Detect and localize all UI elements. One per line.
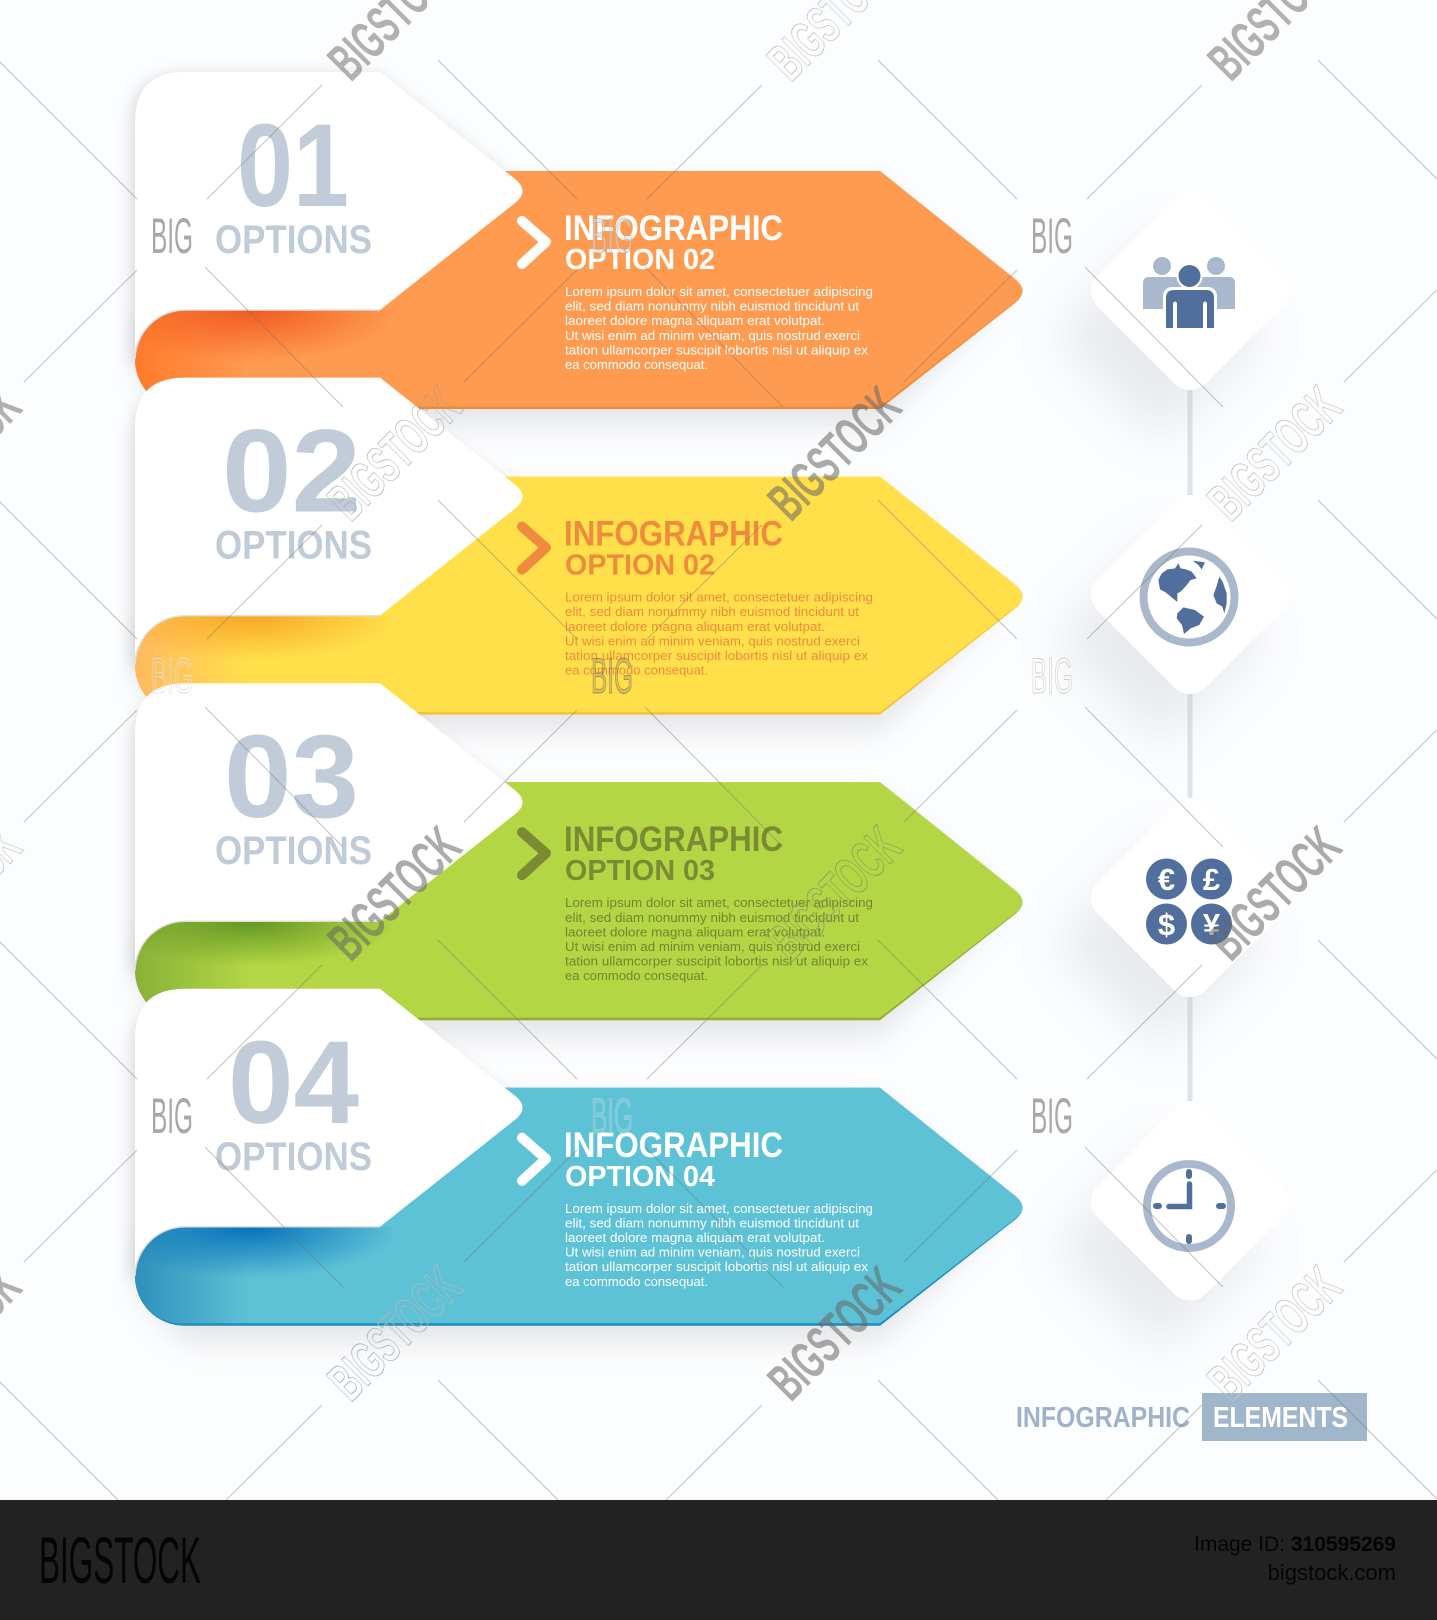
tab lower edge — [135, 1227, 380, 1276]
body text: laoreet dolore magna aliquam erat volutpat. — [565, 620, 825, 634]
number 02: 02 — [222, 406, 361, 538]
body text: tation ullamcorper suscipit lobortis nisl ut aliquip ex — [565, 649, 869, 663]
diamond: currency — [1052, 790, 1298, 1051]
label: infographic elements: INFOGRAPHIC — [1016, 1402, 1190, 1434]
heading: INFOGRAPHIC — [564, 1126, 783, 1165]
orange ribbon — [135, 171, 1022, 409]
diamond: people — [1052, 183, 1298, 444]
body text — [565, 1202, 873, 1289]
subheading: OPTION 04 — [565, 1161, 715, 1193]
white tab back strip — [135, 606, 190, 666]
heading: INFOGRAPHIC — [564, 820, 783, 859]
body text: Ut wisi enim ad minim veniam, quis nostrud exerci — [565, 634, 860, 648]
watermark: BIGSTOCK rotated marks: BIGSTOCK — [1197, 816, 1352, 971]
icon: currency coins: $ — [1158, 907, 1175, 942]
tab lower edge — [135, 921, 380, 970]
label: infographic elements: ELEMENTS — [1213, 1402, 1348, 1434]
body text: laoreet dolore magna aliquam erat volutpat. — [565, 925, 825, 939]
body text: Lorem ipsum dolor sit amet, consectetuer adipiscing — [565, 285, 873, 299]
ribbon shadow — [140, 1107, 1000, 1342]
options label: OPTIONS — [215, 524, 372, 568]
watermark: BIG marks: BIG — [151, 648, 193, 704]
panel: option 03 — [132, 683, 1022, 1036]
white tab shadow — [132, 391, 512, 669]
watermark: BIG marks: BIG — [591, 648, 633, 704]
body text — [565, 896, 873, 983]
watermark: BIG marks: BIG — [151, 208, 193, 264]
icon: globe — [1144, 552, 1234, 642]
watermark: BIGSTOCK rotated marks: BIGSTOCK — [317, 816, 472, 971]
chevron — [522, 1138, 546, 1181]
text: BIG — [1031, 1088, 1073, 1144]
watermark: BIGSTOCK rotated marks: BIGSTOCK — [1197, 376, 1352, 531]
body text: Lorem ipsum dolor sit amet, consectetuer adipiscing — [565, 1202, 873, 1216]
label: infographic elements — [1016, 1393, 1367, 1441]
white tab shadow — [132, 75, 512, 363]
chevron — [522, 527, 546, 570]
watermark: BIG marks: BIG — [591, 1088, 633, 1144]
body text: tation ullamcorper suscipit lobortis nisl ut aliquip ex — [565, 955, 869, 969]
body text: Lorem ipsum dolor sit amet, consectetuer adipiscing — [565, 591, 873, 605]
body text: ea commodo consequat. — [565, 664, 708, 678]
watermark: BIGSTOCK rotated marks: BIGSTOCK — [1197, 1256, 1352, 1411]
footer bar — [0, 1500, 1437, 1620]
watermark: BIGSTOCK rotated marks: BIGSTOCK — [757, 1256, 912, 1411]
body text: tation ullamcorper suscipit lobortis nisl ut aliquip ex — [565, 1260, 869, 1274]
text: BIG — [1031, 648, 1073, 704]
body text: elit, sed diam nonummy nibh euismod tincidunt ut — [565, 911, 860, 925]
icon: currency coins: ¥ — [1203, 907, 1221, 942]
subheading: OPTION 02 — [565, 244, 715, 276]
icon: currency coins: £ — [1203, 862, 1220, 897]
chevron — [522, 221, 546, 264]
diamond: clock — [1052, 1093, 1298, 1355]
number 04: 04 — [228, 1017, 359, 1149]
body text: Lorem ipsum dolor sit amet, consectetuer adipiscing — [565, 896, 873, 910]
ribbon shadow — [140, 496, 1000, 731]
options label: OPTIONS — [215, 218, 372, 262]
yellow ribbon — [135, 477, 1022, 715]
body text: ea commodo consequat. — [565, 358, 708, 372]
white tab — [135, 72, 522, 310]
watermark: BIG marks: BIG — [151, 1088, 193, 1144]
white tab back strip — [135, 1217, 190, 1277]
body text — [565, 591, 873, 678]
white tab — [135, 989, 522, 1227]
icon: currency coins: € — [1158, 862, 1175, 897]
body text: tation ullamcorper suscipit lobortis nisl ut aliquip ex — [565, 343, 869, 357]
text: BIG — [1031, 208, 1073, 264]
tab lower edge — [135, 616, 380, 665]
body text: Ut wisi enim ad minim veniam, quis nostrud exerci — [565, 329, 860, 343]
green ribbon — [135, 782, 1022, 1020]
panel: option 04 — [132, 989, 1022, 1342]
watermark: BIGSTOCK rotated marks: BIGSTOCK — [757, 376, 912, 531]
number 01: 01 — [237, 100, 349, 232]
body text: Ut wisi enim ad minim veniam, quis nostrud exerci — [565, 1246, 860, 1260]
white tab back strip — [135, 911, 190, 971]
options label: OPTIONS — [215, 1135, 372, 1179]
panel: option 02 — [132, 378, 1022, 731]
body text: elit, sed diam nonummy nibh euismod tincidunt ut — [565, 605, 860, 619]
icon: currency coins — [1146, 858, 1232, 944]
blue ribbon — [135, 1088, 1022, 1326]
watermark: BIGSTOCK rotated marks: BIGSTOCK — [317, 1256, 472, 1411]
chevron — [522, 832, 546, 875]
tab lower edge — [135, 310, 380, 359]
options label: OPTIONS — [215, 829, 372, 873]
timeline connector lines — [1188, 390, 1192, 1101]
white tab shadow — [132, 696, 512, 974]
body text: elit, sed diam nonummy nibh euismod tincidunt ut — [565, 1216, 860, 1230]
body text: laoreet dolore magna aliquam erat volutpat. — [565, 314, 825, 328]
diamond: globe — [1052, 487, 1298, 748]
icon: people — [1143, 257, 1235, 329]
white tab — [135, 683, 522, 921]
body text — [565, 285, 873, 372]
heading: INFOGRAPHIC — [564, 209, 783, 248]
body text: laoreet dolore magna aliquam erat volutpat. — [565, 1231, 825, 1245]
watermark: BIG marks — [151, 208, 1073, 1144]
body text: ea commodo consequat. — [565, 1275, 708, 1289]
watermark: BIGSTOCK rotated marks: BIGSTOCK — [317, 376, 472, 531]
white tab back strip — [135, 300, 190, 360]
site url: bigstock.com — [1268, 1560, 1396, 1585]
watermark: BIG marks: BIG — [591, 208, 633, 264]
footer bar: BIGSTOCK — [39, 1523, 201, 1597]
body text: ea commodo consequat. — [565, 969, 708, 983]
ribbon shadow — [140, 801, 1000, 1036]
subheading: OPTION 02 — [565, 550, 715, 582]
image id: Image ID: 310595269 — [1194, 1533, 1396, 1556]
watermark: BIGSTOCK rotated marks: BIGSTOCK — [757, 816, 912, 971]
subheading: OPTION 03 — [565, 855, 715, 887]
icon: clock — [1147, 1164, 1231, 1248]
body text: elit, sed diam nonummy nibh euismod tincidunt ut — [565, 300, 860, 314]
heading: INFOGRAPHIC — [564, 515, 783, 554]
white tab — [135, 378, 522, 616]
body text: Ut wisi enim ad minim veniam, quis nostrud exerci — [565, 940, 860, 954]
number 03: 03 — [224, 711, 359, 843]
panel: option 01 — [132, 72, 1022, 425]
white tab shadow — [132, 1002, 512, 1280]
ribbon shadow — [140, 190, 1000, 425]
